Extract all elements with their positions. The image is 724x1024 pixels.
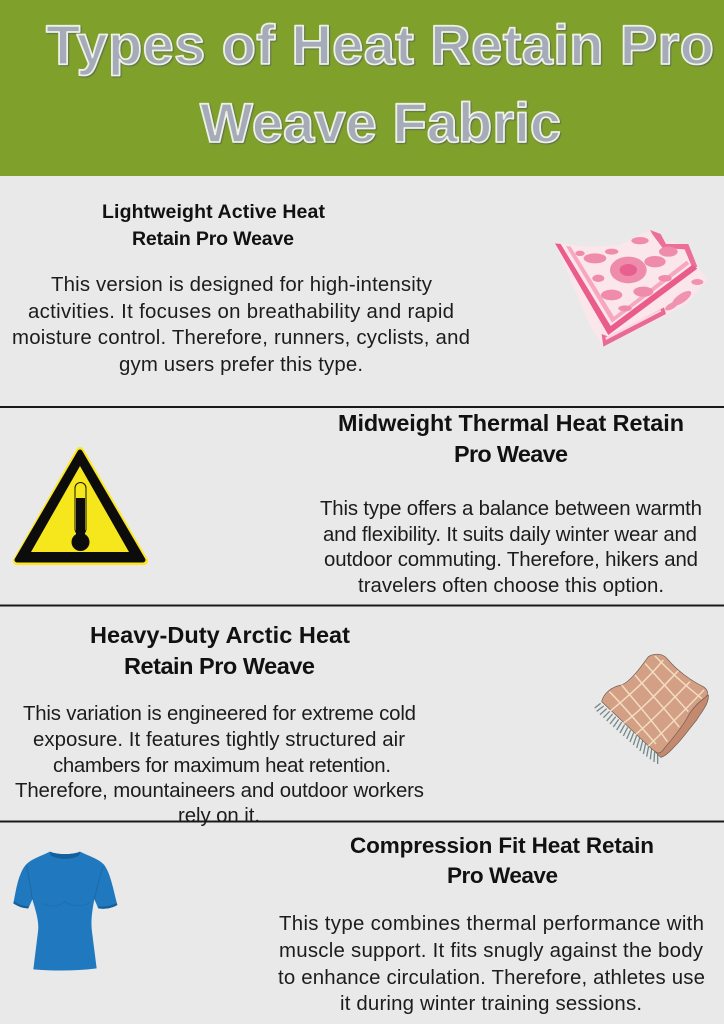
heading: compression fit — [350, 833, 654, 888]
text block: midweight thermal description — [320, 498, 702, 597]
text block: heavy-duty arctic description: Therefore, mountaineers and outdoor workers — [15, 780, 424, 802]
title: Types of Heat Retain Pro — [46, 13, 714, 76]
heading: heavy-duty arctic: Retain Pro Weave — [124, 653, 315, 679]
heading: lightweight active — [102, 201, 326, 250]
text block: compression fit description: This type combines thermal performance with — [279, 913, 704, 935]
title: Weave Fabric — [200, 91, 561, 154]
text block: lightweight active description: activities. It focuses on breathability and rapid — [28, 301, 454, 323]
icon: blue compression t-shirt — [13, 852, 117, 970]
heading: heavy-duty arctic: Heavy-Duty Arctic Heat — [90, 622, 350, 648]
text block: midweight thermal description: This type offers a balance between warmth — [320, 498, 702, 520]
icon: plaid blanket with fringe — [595, 654, 708, 764]
heading: compression fit: Compression Fit Heat Retain — [350, 833, 654, 858]
text block: lightweight active description: gym users prefer this type. — [119, 354, 363, 376]
text block: lightweight active description: moisture control. Therefore, runners, cyclists, and — [12, 327, 470, 349]
heading: midweight thermal — [338, 410, 684, 467]
text block: lightweight active description: This version is designed for high-intensity — [51, 274, 433, 296]
icon: thermometer warning sign — [17, 451, 144, 561]
text block: heavy-duty arctic description: This variation is engineered for extreme cold — [23, 703, 416, 725]
heading: midweight thermal: Pro Weave — [454, 441, 568, 467]
panel: compression fit — [13, 833, 705, 1015]
text block: lightweight active description — [12, 274, 470, 376]
text block: heavy-duty arctic description: rely on it. — [178, 805, 260, 827]
text block: heavy-duty arctic description: exposure. It features tightly structured air — [33, 729, 405, 751]
heading: lightweight active: Lightweight Active Heat — [102, 201, 326, 223]
heading: lightweight active: Retain Pro Weave — [132, 228, 294, 250]
icon: pink floral scarf — [555, 230, 707, 347]
heading: compression fit: Pro Weave — [447, 863, 558, 888]
heading: heavy-duty arctic — [90, 622, 350, 679]
text block: compression fit description: to enhance circulation. Therefore, athletes use — [278, 967, 705, 989]
text block: compression fit description: muscle support. It fits snugly against the body — [279, 940, 704, 962]
text block: midweight thermal description: and flexibility. It suits daily winter wear and — [323, 524, 697, 546]
text block: heavy-duty arctic description: chambers for maximum heat retention. — [53, 755, 391, 777]
text block: compression fit description: it during winter training sessions. — [340, 993, 642, 1015]
text block: midweight thermal description: outdoor commuting. Therefore, hikers and — [324, 549, 698, 571]
text block: midweight thermal description: travelers often choose this option. — [358, 575, 664, 597]
text block: heavy-duty arctic description — [15, 703, 424, 827]
panel: lightweight active — [12, 201, 707, 376]
header banner — [0, 0, 724, 176]
text block: compression fit description — [278, 913, 705, 1015]
title — [46, 13, 714, 154]
heading: midweight thermal: Midweight Thermal Heat Retain — [338, 410, 684, 436]
panel: midweight thermal — [17, 410, 702, 597]
panel: heavy-duty arctic — [15, 622, 708, 827]
